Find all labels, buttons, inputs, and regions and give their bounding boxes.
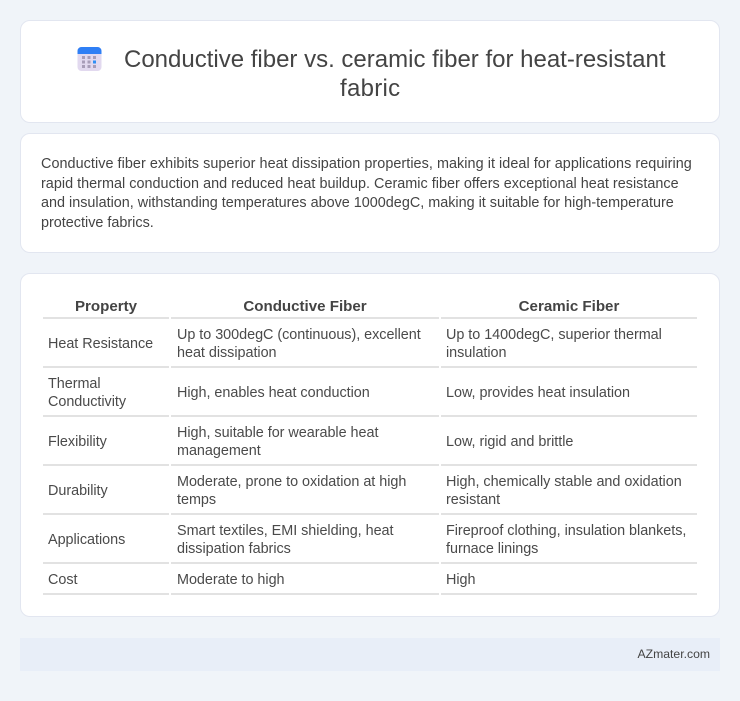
summary text: Conductive fiber exhibits superior heat dissipation properties, making it ideal for applications requiring xyxy=(41,156,692,172)
header: ceramic fiber: Ceramic Fiber xyxy=(519,298,619,315)
row: applications: Smart textiles, EMI shielding, heat xyxy=(177,523,394,539)
title: fabric xyxy=(340,75,400,102)
row: applications: Applications xyxy=(48,532,125,548)
row: applications xyxy=(48,523,686,557)
row: cost xyxy=(48,572,475,588)
row: thermal conductivity: High, enables heat conduction xyxy=(177,385,370,401)
row: flexibility xyxy=(48,425,573,459)
row: flexibility: Low, rigid and brittle xyxy=(446,434,573,450)
row: durability: temps xyxy=(177,492,216,508)
row: flexibility: Flexibility xyxy=(48,434,107,450)
row: durability xyxy=(48,474,682,508)
row: heat resistance: Up to 300degC (continuous), excellent xyxy=(177,327,421,343)
summary text: rapid thermal conduction and reduced heat buildup. Ceramic fiber offers exceptional heat resistance xyxy=(41,176,679,192)
summary text: protective fabrics. xyxy=(41,214,154,230)
icon: calendar xyxy=(78,47,102,71)
row: cost: Cost xyxy=(48,572,77,588)
row: thermal conductivity: Low, provides heat insulation xyxy=(446,385,630,401)
summary card xyxy=(20,133,720,253)
table card xyxy=(20,273,720,617)
row: thermal conductivity: Thermal xyxy=(48,376,101,392)
row: durability: resistant xyxy=(446,492,500,508)
row: applications: dissipation fabrics xyxy=(177,541,291,557)
row: applications: furnace linings xyxy=(446,541,538,557)
row: heat resistance: Up to 1400degC, superior thermal xyxy=(446,327,662,343)
row: heat resistance: heat dissipation xyxy=(177,345,277,361)
row: heat resistance xyxy=(48,327,662,361)
row: durability: High, chemically stable and oxidation xyxy=(446,474,682,490)
row: cost: Moderate to high xyxy=(177,572,285,588)
summary text xyxy=(41,156,692,230)
footer bar xyxy=(20,638,720,671)
row: heat resistance: insulation xyxy=(446,345,507,361)
row: durability: Moderate, prone to oxidation at high xyxy=(177,474,406,490)
header: property: Property xyxy=(75,298,137,315)
title card xyxy=(20,20,720,123)
row: flexibility: High, suitable for wearable heat xyxy=(177,425,378,441)
title xyxy=(124,46,666,102)
row: heat resistance: Heat Resistance xyxy=(48,336,153,352)
row: thermal conductivity: Conductivity xyxy=(48,394,126,410)
summary text: and insulation, withstanding temperatures above 1000degC, making it suitable for high-temperature xyxy=(41,195,674,211)
title: Conductive fiber vs. ceramic fiber for heat-resistant xyxy=(124,46,666,73)
row: thermal conductivity xyxy=(48,376,630,410)
header: conductive fiber: Conductive Fiber xyxy=(243,298,367,315)
row: durability: Durability xyxy=(48,483,108,499)
row: cost: High xyxy=(446,572,475,588)
row: applications: Fireproof clothing, insulation blankets, xyxy=(446,523,686,539)
comparison table xyxy=(43,298,697,595)
footer credit: AZmater.com xyxy=(638,647,710,661)
row: flexibility: management xyxy=(177,443,261,459)
